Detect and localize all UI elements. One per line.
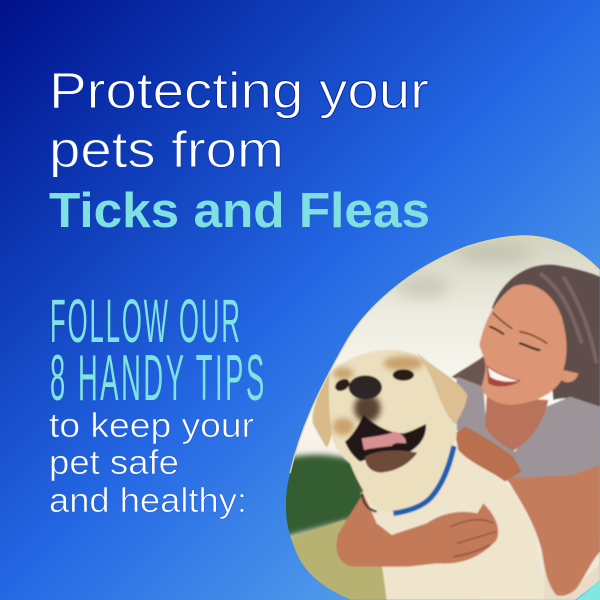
intro text: and healthy: xyxy=(49,482,247,520)
hand on dog xyxy=(455,427,522,482)
handwritten subheading xyxy=(50,287,264,414)
woman smile xyxy=(487,365,521,386)
dog chin xyxy=(365,450,417,473)
dog body xyxy=(360,447,545,600)
shirt xyxy=(456,376,600,482)
intro text: pet safe xyxy=(49,444,179,482)
clouds xyxy=(397,243,533,297)
intro text: to keep your xyxy=(49,407,254,445)
sky xyxy=(280,230,600,600)
right arm xyxy=(507,465,600,596)
grass xyxy=(290,519,388,600)
title xyxy=(49,62,430,238)
dog tan markings xyxy=(333,356,423,435)
woman hair xyxy=(492,265,600,417)
handwritten subheading: FOLLOW OUR xyxy=(50,287,240,355)
title: Ticks and Fleas xyxy=(49,184,430,238)
dog eyes xyxy=(333,369,414,393)
title: Protecting your xyxy=(49,62,429,119)
dog tongue xyxy=(362,432,406,450)
intro text xyxy=(49,407,254,520)
hugging arm xyxy=(336,493,498,567)
neck xyxy=(485,397,548,451)
cream fur bottom right xyxy=(544,564,600,600)
dog mouth xyxy=(345,415,426,462)
mint corner xyxy=(577,580,600,600)
hair highlights xyxy=(540,273,597,363)
handwritten subheading: 8 HANDY TIPS xyxy=(50,341,264,414)
photo: woman hugging labrador xyxy=(280,230,600,600)
collar strap xyxy=(362,493,377,512)
title: pets from xyxy=(49,121,284,178)
dog head xyxy=(328,350,457,512)
woman back hair xyxy=(451,356,487,387)
dog collar xyxy=(393,446,454,513)
face xyxy=(479,284,578,405)
dog nose xyxy=(349,375,382,399)
woman eyes and brows xyxy=(490,313,547,350)
trees xyxy=(280,455,367,538)
dog ears xyxy=(312,370,332,447)
photo edge highlight xyxy=(290,236,600,473)
fingers xyxy=(450,520,497,557)
